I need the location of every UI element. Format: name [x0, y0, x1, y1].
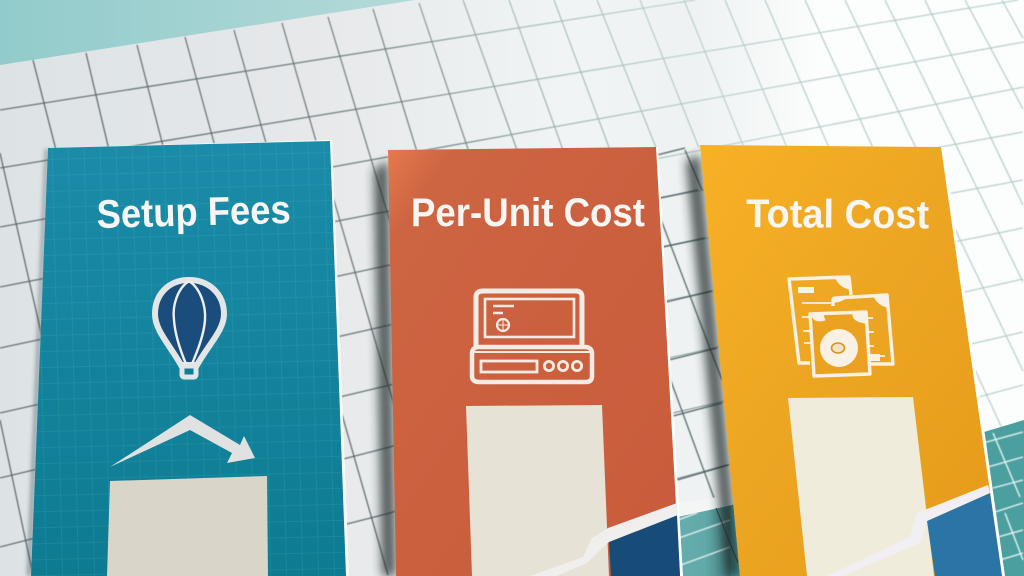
cream bar	[107, 476, 268, 576]
icon: hot air balloon	[155, 280, 224, 377]
icon: stacked documents with disc	[789, 277, 893, 376]
cream bar	[466, 405, 609, 576]
cream bar	[788, 397, 934, 576]
blue cost wedge	[927, 493, 1002, 576]
heading: Per-Unit Cost: Per-Unit Cost	[411, 191, 645, 235]
arrow: rising then falling cost	[110, 415, 255, 467]
trend line	[827, 485, 990, 576]
icon: cash register	[472, 291, 592, 382]
panel: total cost	[686, 145, 1005, 576]
trend line	[530, 503, 678, 576]
heading: Setup Fees: Setup Fees	[96, 188, 291, 237]
panel: per-unit cost	[374, 147, 683, 576]
panel: setup fees	[27, 140, 349, 576]
navy cost wedge	[609, 515, 680, 576]
teal cutting mat, lower right	[677, 420, 1024, 576]
heading: Total Cost: Total Cost	[746, 192, 929, 237]
